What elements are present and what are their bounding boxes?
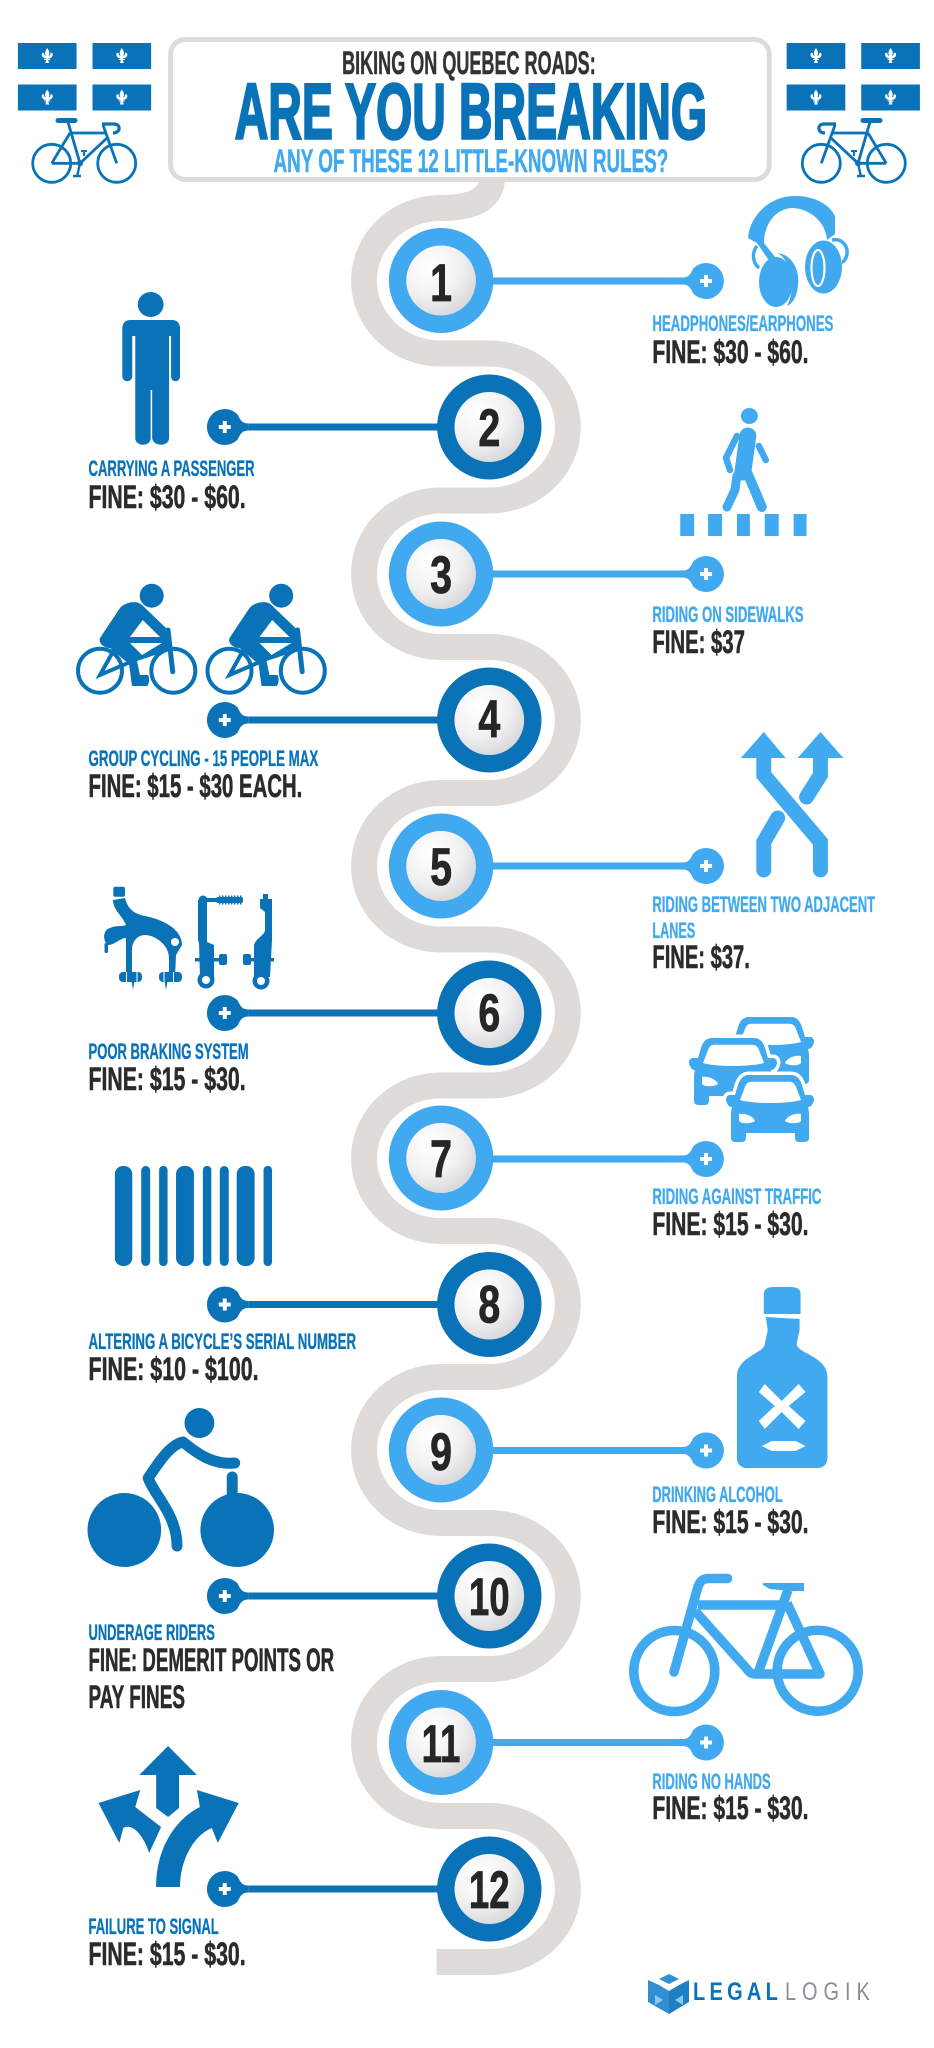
connector 12 xyxy=(207,1871,443,1907)
label 11: RIDING NO HANDS xyxy=(652,1769,771,1794)
logo mark xyxy=(648,1974,689,2014)
fine 11: FINE: $15 - $30. xyxy=(652,1790,809,1826)
fine 4: FINE: $15 - $30 EACH. xyxy=(89,768,302,804)
fine 9: FINE: $15 - $30. xyxy=(652,1504,809,1540)
rule 6: braking system xyxy=(89,887,542,1097)
number badge 10 xyxy=(437,1544,542,1648)
label 10: UNDERAGE RIDERS xyxy=(89,1620,215,1645)
connector 5 xyxy=(487,848,724,884)
label 5 xyxy=(652,892,876,943)
number badge 3 xyxy=(389,522,493,626)
icon: pedestrian on crosswalk xyxy=(680,408,807,536)
connector 8 xyxy=(207,1286,443,1322)
number badge 2 xyxy=(437,374,542,480)
logo: LegalLogik xyxy=(648,1974,870,2014)
number badge 11: 11 xyxy=(422,1715,460,1774)
fine 8: FINE: $10 - $100. xyxy=(89,1351,259,1387)
rule 11: riding no hands xyxy=(389,1578,858,1826)
connector 4 xyxy=(207,702,443,738)
label 7: RIDING AGAINST TRAFFIC xyxy=(652,1184,822,1209)
number badge 4: 4 xyxy=(478,690,501,749)
fine 3: FINE: $37 xyxy=(652,624,745,660)
connector 6 xyxy=(207,995,443,1031)
label 5: LANES xyxy=(652,918,695,943)
fine 5: FINE: $37. xyxy=(652,939,750,975)
label 8: ALTERING A BICYCLE’S SERIAL NUMBER xyxy=(89,1329,356,1354)
heading: subtitle: ANY OF THESE 12 LITTLE-KNOWN RULES? xyxy=(273,143,668,179)
label 2: CARRYING A PASSENGER xyxy=(89,456,255,481)
icon: barcode xyxy=(115,1166,272,1266)
fine 7: FINE: $15 - $30. xyxy=(652,1206,809,1242)
connector 9 xyxy=(487,1432,724,1468)
number badge 5 xyxy=(389,814,493,918)
fine 10 xyxy=(89,1642,334,1715)
rule 1: headphones xyxy=(389,196,847,370)
label 4: GROUP CYCLING - 15 PEOPLE MAX xyxy=(89,746,318,771)
icon: bottle xyxy=(737,1287,827,1468)
number badge 6 xyxy=(437,960,542,1066)
number badge 9: 9 xyxy=(430,1423,452,1482)
rule 5: adjacent lanes xyxy=(389,732,876,975)
number badge 10: 10 xyxy=(469,1568,510,1627)
connector 7 xyxy=(487,1141,724,1177)
icon: traffic cars xyxy=(689,1017,814,1142)
icon: bicycle left xyxy=(33,120,136,182)
icon: two cyclists xyxy=(78,584,325,693)
number badge 8 xyxy=(437,1252,542,1357)
flags right xyxy=(787,43,920,110)
number badge 12 xyxy=(437,1836,542,1942)
label 9: DRINKING ALCOHOL xyxy=(652,1482,783,1507)
number badge 12: 12 xyxy=(469,1861,510,1920)
number badge 8: 8 xyxy=(478,1275,500,1335)
rule 2: carrying a passenger xyxy=(89,292,542,515)
fine 10: FINE: DEMERIT POINTS OR xyxy=(89,1642,334,1678)
winding road xyxy=(364,176,568,1962)
number badge 1 xyxy=(389,228,493,333)
number badge 1: 1 xyxy=(430,254,452,313)
icon: crossing arrows xyxy=(741,732,843,870)
connector 10 xyxy=(207,1578,443,1614)
icon: person xyxy=(122,292,180,445)
fine 12: FINE: $15 - $30. xyxy=(89,1936,246,1972)
label 3: RIDING ON SIDEWALKS xyxy=(652,602,804,627)
rule 3: sidewalks xyxy=(389,408,807,660)
connector 3 xyxy=(487,556,724,592)
connector 1 xyxy=(487,263,724,299)
number badge 9 xyxy=(389,1398,493,1502)
title box xyxy=(171,40,769,180)
label 6: POOR BRAKING SYSTEM xyxy=(89,1039,249,1064)
number badge 7: 7 xyxy=(430,1130,452,1189)
number badge 2: 2 xyxy=(478,399,500,458)
rule 8: serial number xyxy=(89,1166,542,1387)
logo wordmark: LOGIK xyxy=(785,1978,870,2006)
number badge 5: 5 xyxy=(430,838,452,897)
header panel xyxy=(18,40,920,182)
heading: kicker: BIKING ON QUEBEC ROADS: xyxy=(342,45,596,81)
logo wordmark: LEGAL xyxy=(693,1978,778,2006)
logo wordmark xyxy=(693,1978,870,2006)
connector 2 xyxy=(207,409,443,445)
icon: brakes xyxy=(104,887,274,990)
icon: child cyclist xyxy=(88,1408,274,1567)
icon: direction arrows xyxy=(98,1746,239,1887)
number badge 11 xyxy=(389,1690,493,1795)
number badge 6: 6 xyxy=(478,984,500,1043)
rule 4: group cycling xyxy=(78,584,542,804)
number badge 3: 3 xyxy=(430,546,452,605)
icon: bicycle xyxy=(634,1578,858,1712)
number badge 4 xyxy=(437,668,542,772)
rule 9: drinking alcohol xyxy=(389,1287,827,1540)
rule 12: failure to signal xyxy=(89,1746,542,1972)
icon: bicycle right xyxy=(802,120,905,182)
fine 2: FINE: $30 - $60. xyxy=(89,479,246,515)
number badge 7 xyxy=(389,1106,493,1210)
flags left xyxy=(18,43,151,110)
icon: headphones xyxy=(748,196,847,307)
connector 11 xyxy=(487,1724,724,1760)
rule 7: riding against traffic xyxy=(389,1017,822,1242)
fine 10: PAY FINES xyxy=(89,1679,185,1715)
fine 1: FINE: $30 - $60. xyxy=(652,334,809,370)
rule 10: underage riders xyxy=(88,1408,542,1715)
fine 6: FINE: $15 - $30. xyxy=(89,1061,246,1097)
label 12: FAILURE TO SIGNAL xyxy=(89,1914,219,1939)
